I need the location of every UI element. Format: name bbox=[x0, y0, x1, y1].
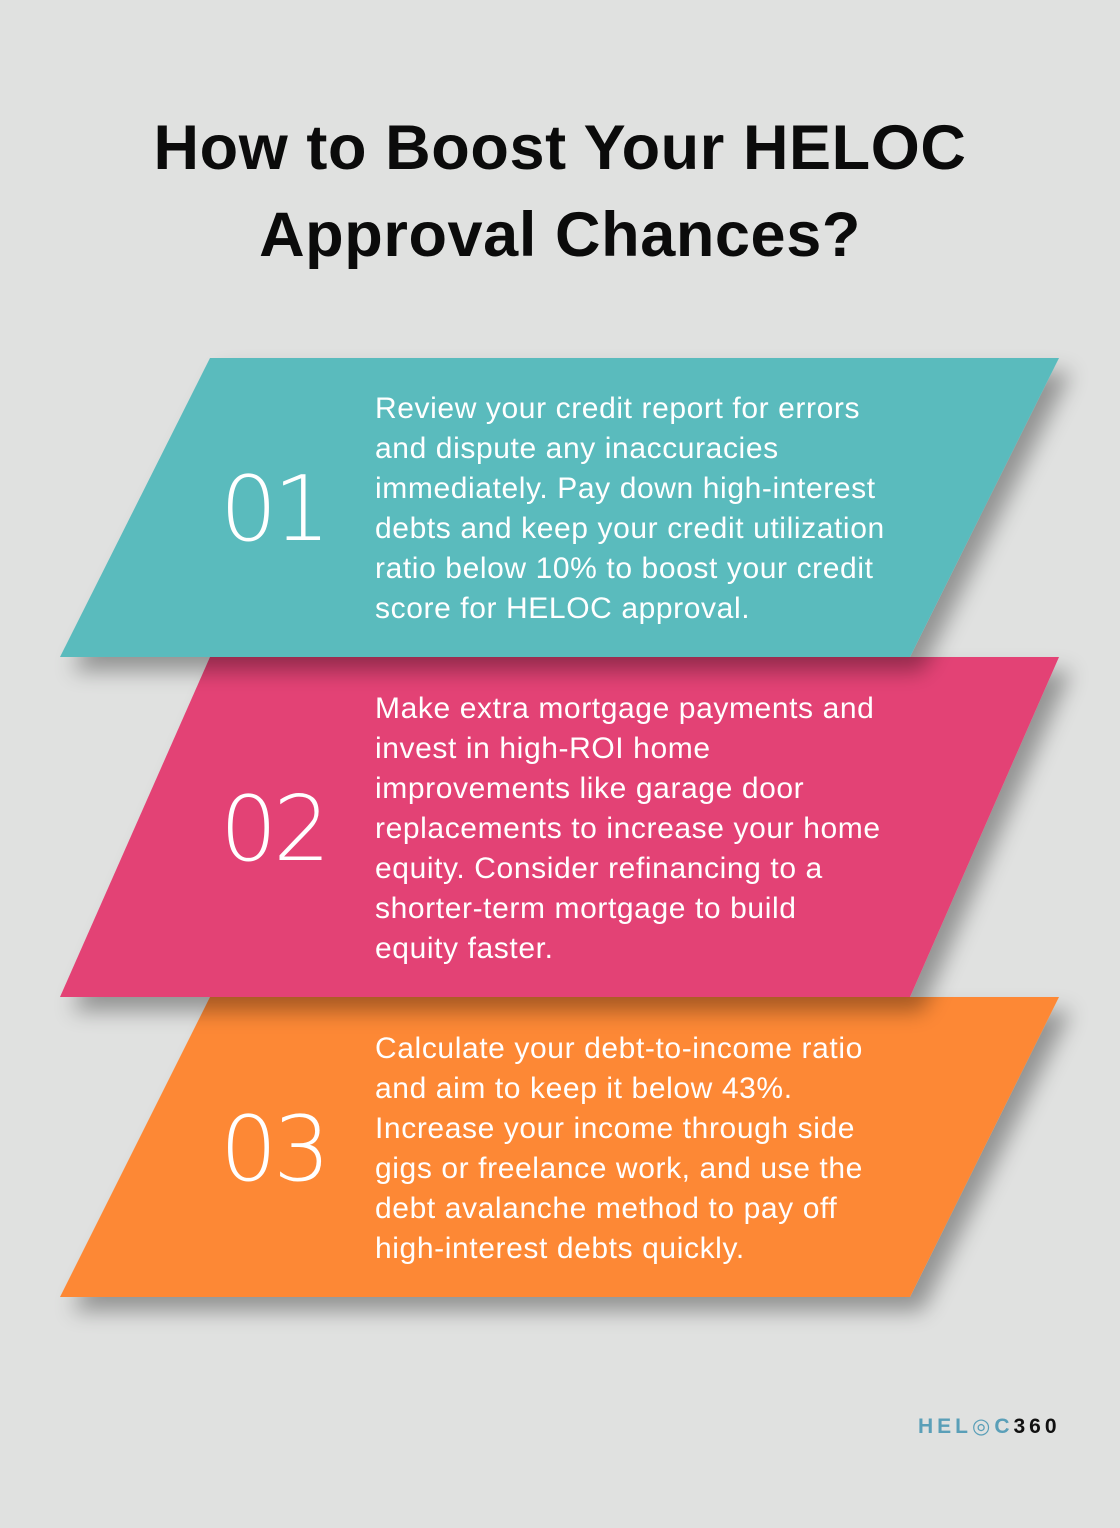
text step 1: Review your credit report for errors bbox=[375, 392, 860, 425]
text step 3 bbox=[375, 1032, 863, 1265]
text step 2: replacements to increase your home bbox=[375, 812, 881, 845]
text step 2: Make extra mortgage payments and bbox=[375, 692, 874, 725]
text step 1: immediately. Pay down high-interest bbox=[375, 472, 876, 505]
text step 2: improvements like garage door bbox=[375, 772, 804, 805]
text step 2 bbox=[375, 692, 881, 965]
title: How to Boost Your HELOC bbox=[154, 113, 966, 183]
title: Approval Chances? bbox=[259, 200, 861, 270]
panel: step 3 bbox=[60, 997, 1059, 1297]
text step 3: gigs or freelance work, and use the bbox=[375, 1152, 863, 1185]
text step 1: ratio below 10% to boost your credit bbox=[375, 552, 874, 585]
title bbox=[154, 113, 966, 270]
number 03: 03 bbox=[220, 1097, 327, 1202]
text step 3: Increase your income through side bbox=[375, 1112, 855, 1145]
number 01: 01 bbox=[220, 457, 327, 562]
text step 1 bbox=[375, 392, 885, 625]
text step 3: and aim to keep it below 43%. bbox=[375, 1072, 793, 1105]
logo: HEL◎C360 bbox=[918, 1415, 1061, 1438]
text step 1: score for HELOC approval. bbox=[375, 592, 750, 625]
text step 3: Calculate your debt-to-income ratio bbox=[375, 1032, 863, 1065]
text step 2: invest in high-ROI home bbox=[375, 732, 711, 765]
text step 2: shorter-term mortgage to build bbox=[375, 892, 797, 925]
text step 3: debt avalanche method to pay off bbox=[375, 1192, 837, 1225]
number 02: 02 bbox=[220, 777, 327, 882]
text step 1: debts and keep your credit utilization bbox=[375, 512, 885, 545]
text step 2: equity faster. bbox=[375, 932, 554, 965]
text step 2: equity. Consider refinancing to a bbox=[375, 852, 823, 885]
panel: step 1 bbox=[60, 358, 1059, 657]
text step 3: high-interest debts quickly. bbox=[375, 1232, 745, 1265]
panel: step 2 bbox=[60, 657, 1059, 997]
text step 1: and dispute any inaccuracies bbox=[375, 432, 779, 465]
